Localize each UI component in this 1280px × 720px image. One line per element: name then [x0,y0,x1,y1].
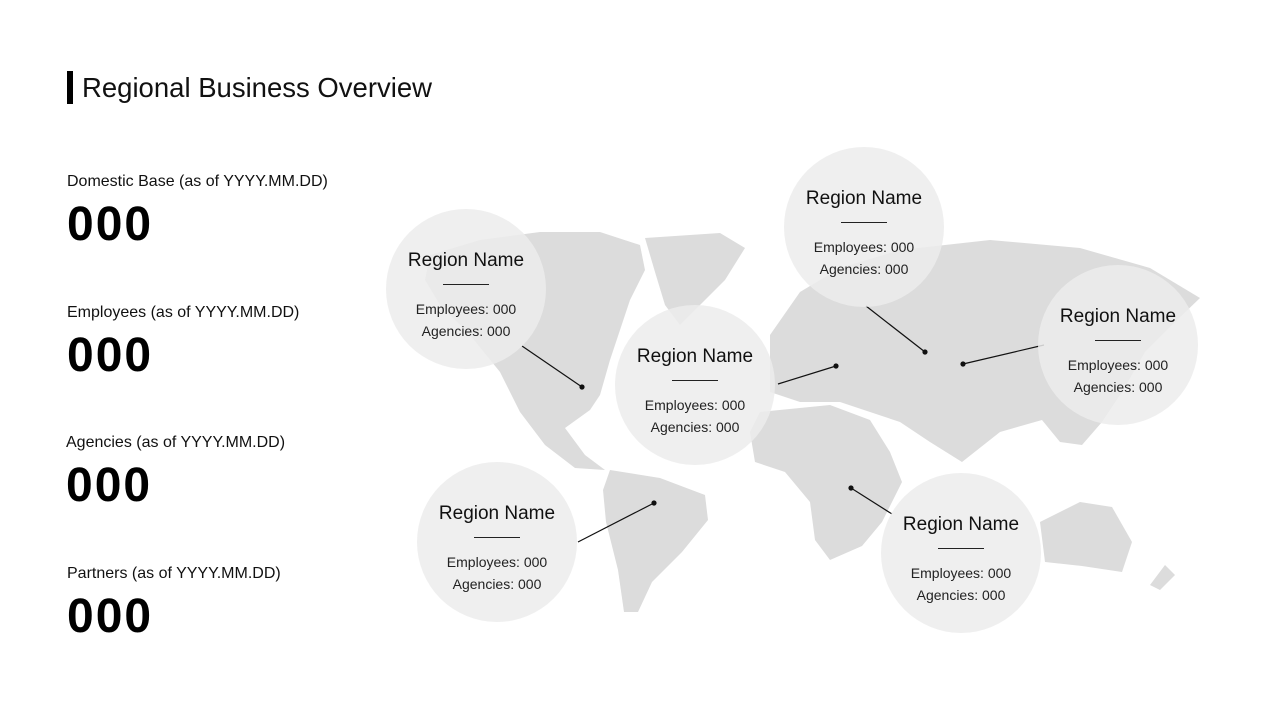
region circle: east asia: Employees: 000 [1068,357,1168,373]
region circle: africa: Region Name [903,514,1019,535]
region circle: south america: Region Name [439,503,555,524]
stat: employees: 000 [67,329,153,382]
stat: employees: Employees (as of YYYY.MM.DD) [67,304,299,321]
region circle: north america: Employees: 000 [416,301,516,317]
stat: partners: Partners (as of YYYY.MM.DD) [67,565,281,582]
region circle: africa: Employees: 000 [911,565,1011,581]
region circle: russia: Employees: 000 [814,239,914,255]
stat: domestic base: Domestic Base (as of YYYY.MM.DD) [67,173,328,190]
region circle: africa [881,473,1041,633]
region circle: south america [417,462,577,622]
region circle: east asia: Agencies: 000 [1074,379,1162,395]
region circle: europe [615,305,775,465]
stat: agencies: Agencies (as of YYYY.MM.DD) [66,434,285,451]
region circle: north america: Agencies: 000 [422,323,510,339]
region circle: europe: Agencies: 000 [651,419,739,435]
region circle: africa: Agencies: 000 [917,587,1005,603]
stat: partners [67,565,281,643]
stat: employees [67,304,299,382]
title: Regional Business Overview [82,72,432,103]
connector lines [522,306,1044,542]
region circle: europe: Employees: 000 [645,397,745,413]
region circle: east asia [1038,265,1198,425]
stat: domestic base: 000 [67,198,153,251]
region circle: russia: Agencies: 000 [820,261,908,277]
region circle: europe: Region Name [637,346,753,367]
stat: partners: 000 [67,590,153,643]
region circle: russia: Region Name [806,188,922,209]
stat: domestic base [67,173,328,251]
region circle: east asia: Region Name [1060,306,1176,327]
region circle: north america [386,209,546,369]
region circle: south america: Agencies: 000 [453,576,541,592]
stat: agencies: 000 [66,459,152,512]
stat: agencies [66,434,285,512]
region circle: russia [784,147,944,307]
region circle: south america: Employees: 000 [447,554,547,570]
region circle: north america: Region Name [408,250,524,271]
